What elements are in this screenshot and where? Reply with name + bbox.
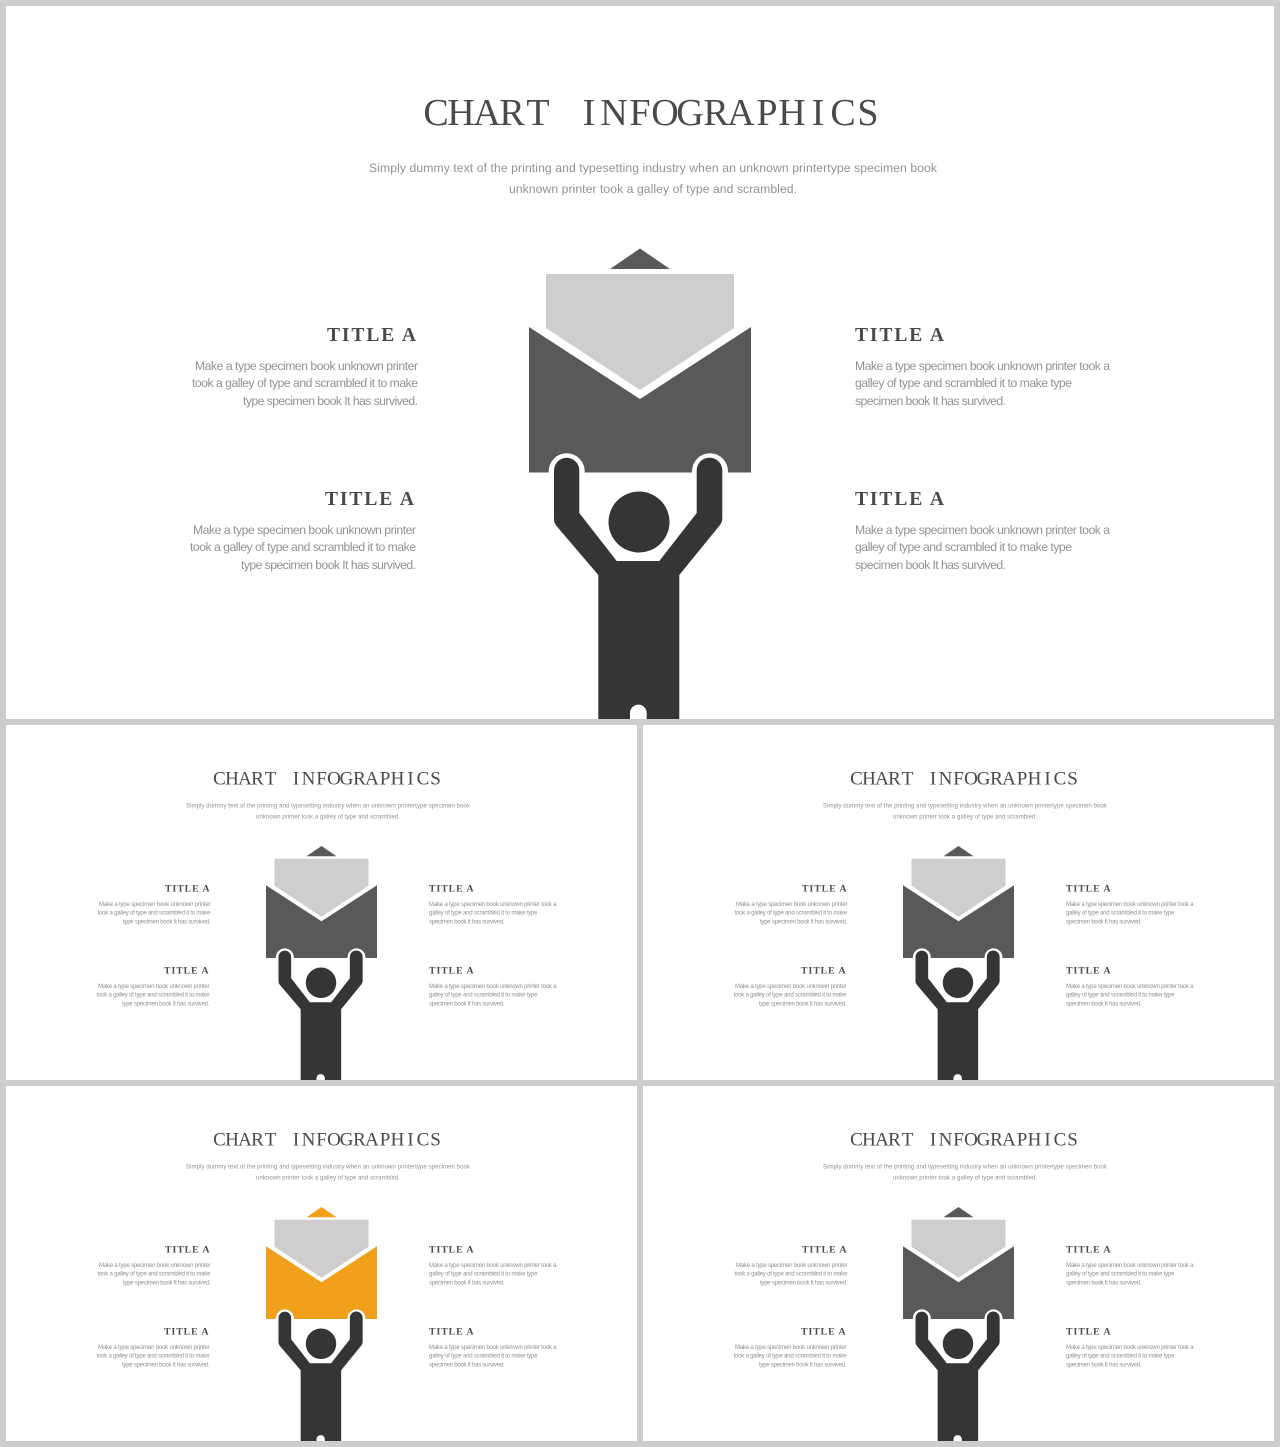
text block: bottom right: specimen book It has survived. [429, 1000, 505, 1007]
text block: bottom left: took a galley of type and scrambled it to make [734, 1352, 847, 1359]
title: CHART INFOGRAPHICS [850, 1129, 1078, 1150]
text block: bottom right: TITLE A [1066, 965, 1110, 976]
text block: bottom left: TITLE A [801, 1326, 846, 1337]
text block: top left: TITLE A [327, 325, 416, 346]
text block: top left: Make a type specimen book unknown printer [99, 1262, 210, 1269]
text block: bottom left: type specimen book It has survived. [241, 558, 416, 572]
text block: top right: Make a type specimen book unknown printer took a [429, 901, 557, 908]
text block: top left [734, 1244, 848, 1286]
text block: bottom right: galley of type and scrambled it to make type [1066, 1352, 1175, 1359]
text block: bottom left [734, 1326, 847, 1368]
text block: bottom right [1066, 1326, 1194, 1368]
text block: top right [429, 883, 557, 925]
icon: person holding envelope [266, 846, 377, 1082]
text block: bottom right: specimen book It has survived. [1066, 1000, 1142, 1007]
text block: top right: TITLE A [1066, 883, 1110, 894]
text block: bottom right: specimen book It has survived. [429, 1361, 505, 1368]
text block: top right: galley of type and scrambled it to make type [855, 376, 1072, 390]
text block: top left [734, 883, 848, 925]
text block: top right: Make a type specimen book unknown printer took a [1066, 901, 1194, 908]
text block: bottom right: galley of type and scrambled it to make type [429, 1352, 538, 1359]
text block: bottom left [734, 965, 847, 1007]
text block: bottom right: TITLE A [855, 489, 944, 510]
panel: slide 4 (orange) [6, 1086, 637, 1441]
text block: top right: Make a type specimen book unknown printer took a [855, 359, 1110, 373]
subtitle: Simply dummy text of the printing and typesetting industry when an unknown printertype specimen book [823, 802, 1108, 809]
title: CHART INFOGRAPHICS [213, 1129, 441, 1150]
text block: top right: TITLE A [1066, 1244, 1110, 1255]
text block: bottom left: TITLE A [801, 965, 846, 976]
panel: slide 2 [6, 725, 637, 1080]
text block: top left: Make a type specimen book unknown printer [736, 1262, 848, 1269]
text block: bottom left: Make a type specimen book unknown printer [98, 983, 210, 990]
text block: top left: type specimen book It has survived. [123, 918, 211, 925]
subtitle: Simply dummy text of the printing and typesetting industry when an unknown printertype specimen book [186, 1163, 471, 1170]
subtitle [369, 161, 938, 196]
icon: person holding envelope [529, 248, 751, 720]
text block: bottom right: galley of type and scrambled it to make type [1066, 991, 1175, 998]
text block: top left: took a galley of type and scrambled it to make [192, 376, 418, 390]
text block: bottom right: TITLE A [1066, 1326, 1110, 1337]
text block: bottom right: specimen book It has survived. [1066, 1361, 1142, 1368]
subtitle: Simply dummy text of the printing and typesetting industry when an unknown printertype specimen book [823, 1163, 1108, 1170]
subtitle: unknown printer took a galley of type and scrambled. [256, 813, 400, 820]
text block: top left: type specimen book It has survived. [760, 918, 848, 925]
text block: top left: took a galley of type and scrambled it to make [734, 909, 848, 916]
text block: top left: TITLE A [165, 1244, 210, 1255]
text block: top right: TITLE A [429, 883, 474, 894]
text block: top left: took a galley of type and scrambled it to make [98, 909, 211, 916]
text block: bottom right [429, 965, 557, 1007]
text block: top left: took a galley of type and scrambled it to make [98, 1270, 211, 1277]
text block: top left: TITLE A [165, 883, 210, 894]
text block: top left: Make a type specimen book unknown printer [195, 359, 418, 373]
text block: top right: galley of type and scrambled it to make type [429, 1270, 538, 1277]
text block: bottom left: TITLE A [164, 965, 208, 976]
text block: bottom right: TITLE A [429, 1326, 474, 1337]
subtitle [186, 802, 471, 820]
text block: bottom left: Make a type specimen book unknown printer [735, 1344, 846, 1351]
text block: top left: took a galley of type and scrambled it to make [734, 1270, 848, 1277]
text block: bottom right: Make a type specimen book unknown printer took a [429, 983, 557, 990]
text block: bottom right [429, 1326, 557, 1368]
text block: top left [98, 883, 211, 925]
text block: bottom right: galley of type and scrambled it to make type [855, 540, 1072, 554]
text block: bottom right: specimen book It has survived. [855, 558, 1006, 572]
text block: bottom right: Make a type specimen book unknown printer took a [1066, 1344, 1194, 1351]
text block: top right: specimen book It has survived. [429, 1279, 505, 1286]
text block: bottom left: Make a type specimen book unknown printer [193, 523, 416, 537]
text block: bottom left: type specimen book It has survived. [122, 1000, 210, 1007]
text block: top right: specimen book It has survived. [855, 394, 1006, 408]
text block: bottom right: Make a type specimen book unknown printer took a [1066, 983, 1194, 990]
text block: bottom left: TITLE A [325, 489, 414, 510]
text block: top right: specimen book It has survived. [1066, 1279, 1142, 1286]
text block: top left: Make a type specimen book unknown printer [736, 901, 848, 908]
text block: top right: galley of type and scrambled it to make type [1066, 909, 1175, 916]
subtitle: unknown printer took a galley of type and scrambled. [509, 182, 797, 196]
text block: bottom left: took a galley of type and scrambled it to make [734, 991, 847, 998]
text block: top left: type specimen book It has survived. [123, 1279, 211, 1286]
text block: bottom left: Make a type specimen book unknown printer [735, 983, 846, 990]
text block: bottom left: took a galley of type and scrambled it to make [96, 1352, 210, 1359]
title: CHART INFOGRAPHICS [213, 768, 441, 789]
text block: top left: type specimen book It has survived. [243, 394, 418, 408]
subtitle: unknown printer took a galley of type and scrambled. [893, 813, 1037, 820]
text block: bottom left [190, 489, 416, 572]
panel: main slide [6, 6, 1274, 719]
text block: bottom right [1066, 965, 1194, 1007]
panel: slide 3 [643, 725, 1274, 1080]
panel: slide 5 [643, 1086, 1274, 1441]
text block: bottom right [855, 489, 1110, 572]
text block: bottom left [96, 1326, 210, 1368]
text block: bottom left [96, 965, 210, 1007]
text block: top right: galley of type and scrambled it to make type [429, 909, 538, 916]
text block: top left: type specimen book It has survived. [760, 1279, 848, 1286]
text block: top right [429, 1244, 557, 1286]
icon: person holding envelope [903, 846, 1014, 1082]
text block: top right: TITLE A [855, 325, 944, 346]
text block: top left [98, 1244, 211, 1286]
text block: bottom right: Make a type specimen book unknown printer took a [429, 1344, 557, 1351]
text block: bottom left: Make a type specimen book unknown printer [98, 1344, 210, 1351]
subtitle [186, 1163, 471, 1181]
text block: top right: Make a type specimen book unknown printer took a [429, 1262, 557, 1269]
text block: bottom left: TITLE A [164, 1326, 208, 1337]
text block: bottom left: type specimen book It has survived. [759, 1000, 847, 1007]
subtitle: Simply dummy text of the printing and typesetting industry when an unknown printertype specimen book [369, 161, 938, 175]
text block: top right: specimen book It has survived. [429, 918, 505, 925]
text block: bottom left: took a galley of type and scrambled it to make [96, 991, 210, 998]
subtitle: unknown printer took a galley of type and scrambled. [893, 1174, 1037, 1181]
text block: top left [192, 325, 418, 408]
icon: person holding envelope [903, 1207, 1014, 1442]
text block: top left: TITLE A [802, 883, 846, 894]
text block: top left: Make a type specimen book unknown printer [99, 901, 210, 908]
text block: bottom right: galley of type and scrambled it to make type [429, 991, 538, 998]
subtitle: unknown printer took a galley of type and scrambled. [256, 1174, 400, 1181]
subtitle [823, 802, 1108, 820]
text block: top left: TITLE A [802, 1244, 846, 1255]
text block: bottom left: took a galley of type and scrambled it to make [190, 540, 416, 554]
text block: top right: galley of type and scrambled it to make type [1066, 1270, 1175, 1277]
text block: bottom left: type specimen book It has survived. [759, 1361, 847, 1368]
text block: bottom right: TITLE A [429, 965, 474, 976]
text block: top right [1066, 1244, 1194, 1286]
subtitle [823, 1163, 1108, 1181]
text block: bottom left: type specimen book It has survived. [122, 1361, 210, 1368]
text block: top right: Make a type specimen book unknown printer took a [1066, 1262, 1194, 1269]
subtitle: Simply dummy text of the printing and typesetting industry when an unknown printertype specimen book [186, 802, 471, 809]
text block: top right [1066, 883, 1194, 925]
text block: top right: TITLE A [429, 1244, 474, 1255]
text block: top right: specimen book It has survived. [1066, 918, 1142, 925]
title: CHART INFOGRAPHICS [423, 92, 879, 134]
title: CHART INFOGRAPHICS [850, 768, 1078, 789]
text block: top right [855, 325, 1110, 408]
icon: person holding orange envelope [266, 1207, 377, 1442]
text block: bottom right: Make a type specimen book unknown printer took a [855, 523, 1110, 537]
